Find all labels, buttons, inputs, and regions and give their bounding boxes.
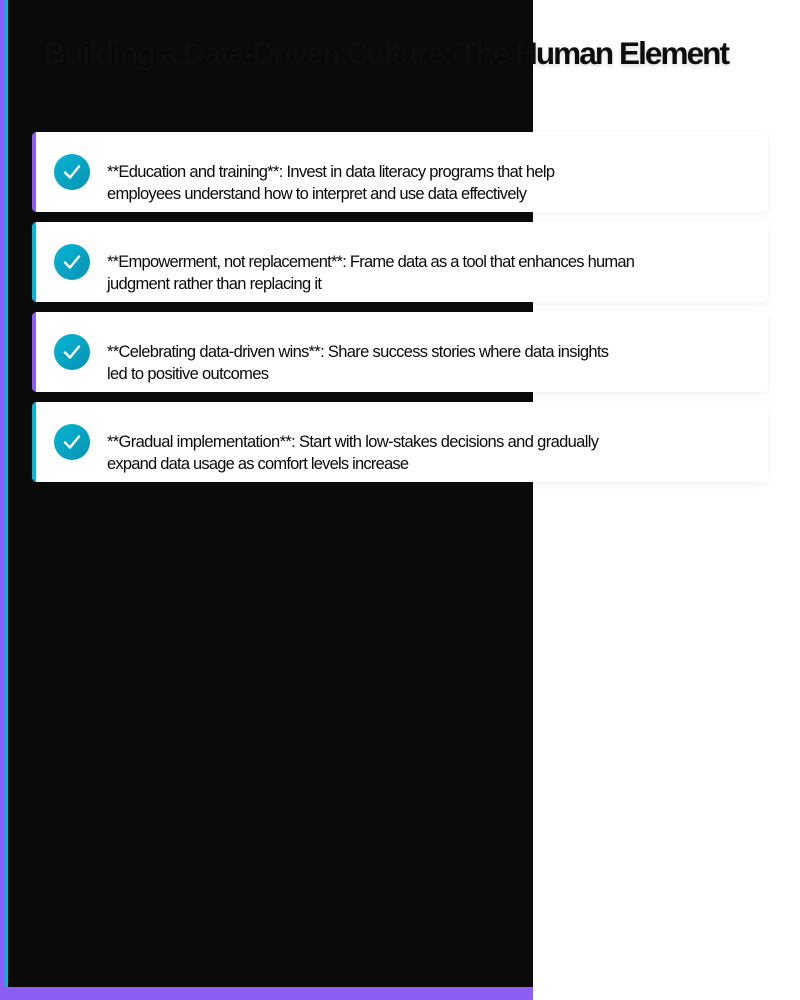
icon: check 1 (54, 154, 90, 190)
text: empowerment: judgment rather than replacing it (106, 275, 322, 293)
card 2: empowerment (32, 222, 768, 302)
card 1: education and training (32, 132, 768, 212)
text: gradual implementation (107, 433, 600, 473)
left accent stripes (0, 0, 8, 1000)
text: education and training (107, 163, 555, 203)
icon: check 2 (54, 244, 90, 280)
icon: check 4 (54, 424, 90, 460)
bottom accent bar (0, 987, 533, 1000)
text: celebrating wins: **Celebrating data-driven wins**: Share success stories where data insights (107, 343, 609, 361)
text: celebrating wins (107, 343, 609, 383)
text: education and training: **Education and training**: Invest in data literacy programs that help (107, 163, 555, 181)
text: empowerment (106, 253, 635, 293)
icon: check 3 (54, 334, 90, 370)
text: gradual implementation: **Gradual implementation**: Start with low-stakes decisions and gradually (107, 433, 600, 451)
text: gradual implementation: expand data usage as comfort levels increase (107, 455, 409, 473)
card 4: gradual implementation (32, 402, 768, 482)
title: Building a Data-Driven Culture: The Human Element (44, 35, 730, 71)
text: celebrating wins: led to positive outcomes (107, 365, 269, 383)
card 3: celebrating wins (32, 312, 768, 392)
text: education and training: employees understand how to interpret and use data effectively (107, 185, 528, 203)
text: empowerment: **Empowerment, not replacement**: Frame data as a tool that enhances human (107, 253, 635, 271)
dark background panel (0, 0, 533, 1000)
